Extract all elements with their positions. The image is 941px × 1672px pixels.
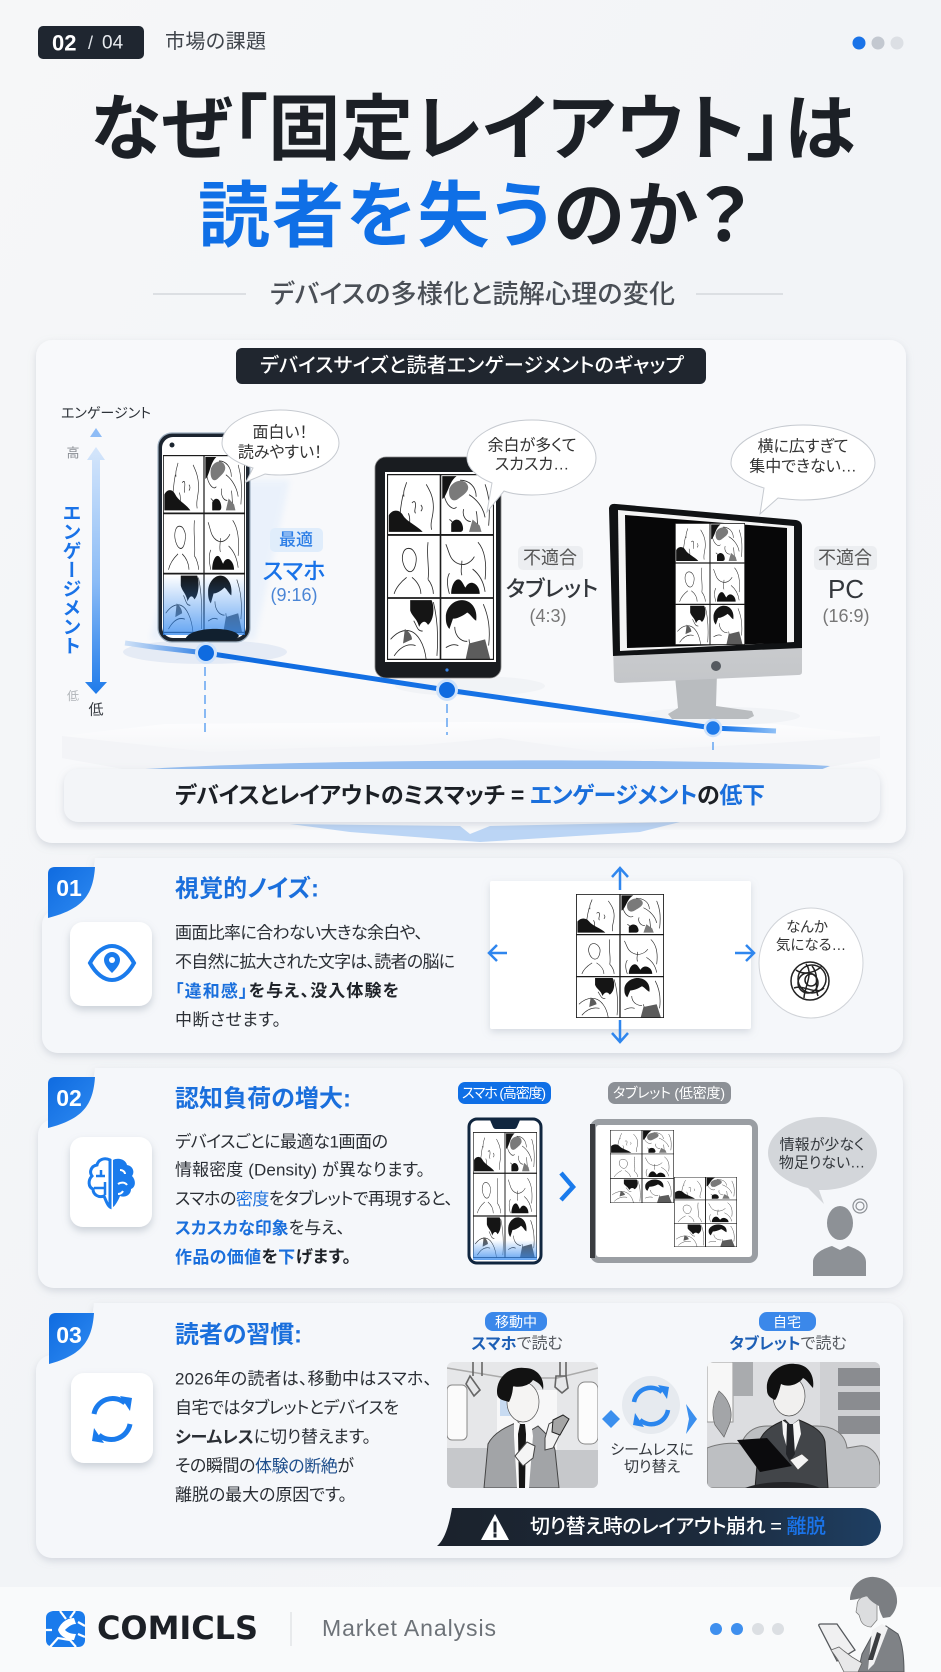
- panel: 03 reader habits: [36, 1303, 903, 1558]
- page badge: [38, 26, 144, 59]
- illustration: reader on train: [447, 1362, 598, 1488]
- bubble: reader discomfort: 気になる…: [776, 937, 846, 954]
- icon: eye: [70, 922, 152, 1006]
- body text: [175, 1370, 432, 1504]
- panel: 02 cognitive load: [38, 1068, 903, 1288]
- page badge: 04: [102, 32, 124, 54]
- body text: 画面比率に合わない大きな余白や、: [175, 924, 423, 942]
- number tab 03: 03: [56, 1322, 82, 1348]
- reader silhouette: [813, 1199, 867, 1276]
- body text: 2026年の読者は、移動中はスマホ、: [175, 1370, 432, 1388]
- label: tablet: [506, 546, 598, 626]
- page badge: 02: [52, 30, 76, 56]
- pill: tablet low density: タブレット (低密度): [613, 1085, 725, 1101]
- tag: commuting: [471, 1312, 563, 1352]
- icon: sync: [71, 1373, 153, 1463]
- summary bar: [64, 769, 880, 822]
- footer: [0, 1577, 941, 1672]
- bubble: smartphone: [222, 410, 339, 482]
- tag: commuting: 移動中: [495, 1314, 537, 1330]
- pill: tablet low density: [608, 1082, 731, 1104]
- chart heading: [236, 348, 706, 384]
- label: pc: 不適合: [818, 548, 872, 568]
- illustration: tablet: [590, 1122, 755, 1260]
- label: smartphone: (9:16): [270, 585, 318, 605]
- platform: [62, 640, 880, 842]
- axis: engagement: エンゲージメント: [60, 503, 81, 655]
- body text: デバイスごとに最適な1画面の: [175, 1132, 388, 1152]
- label: smartphone: 最適: [279, 530, 313, 550]
- chart heading: デバイスサイズと読者エンゲージメントのギャップ: [260, 353, 684, 377]
- tag: home: 自宅: [773, 1314, 801, 1330]
- label: tablet: 不適合: [523, 548, 577, 568]
- label: pc: (16:9): [822, 606, 870, 626]
- panel: device gap chart: [36, 340, 906, 843]
- engagement line: [125, 643, 776, 750]
- title: なぜ「固定レイアウト」は: [90, 90, 855, 170]
- footer dots: [710, 1623, 784, 1635]
- tag: commuting: スマホで読む: [471, 1334, 563, 1352]
- axis: engagement: 低: [88, 702, 104, 718]
- bubble: pc: 横に広すぎて: [758, 438, 848, 456]
- number tab 02: 02: [56, 1085, 82, 1111]
- body text: 情報密度 (Density) が異なります。: [175, 1160, 425, 1180]
- number tab 02: [48, 1077, 95, 1128]
- panel: 01 visual noise: [42, 858, 903, 1053]
- arrow: [561, 1173, 573, 1200]
- body text: [175, 924, 455, 1030]
- bubble: not enough info: 情報が少なく: [780, 1136, 864, 1154]
- warning bar: [437, 1508, 881, 1546]
- number tab 01: 01: [56, 875, 82, 901]
- illustration: oversized margins: [489, 868, 754, 1042]
- body text: 作品の価値を下げます。: [175, 1248, 351, 1266]
- body text: 「違和感」を与え、没入体験を: [175, 980, 399, 1000]
- heading: 認知負荷の増大:: [175, 1086, 351, 1112]
- body text: 離脱の最大の原因です。: [175, 1486, 347, 1504]
- subtitle: デバイスの多様化と読解心理の変化: [270, 279, 675, 309]
- body text: 中断させます。: [175, 1010, 281, 1030]
- label: pc: [814, 546, 877, 626]
- body text: その瞬間の体験の断絶が: [175, 1456, 354, 1476]
- bubble: not enough info: [768, 1117, 877, 1204]
- device: monitor: [609, 504, 802, 719]
- label: tablet: (4:3): [529, 606, 567, 626]
- bubble: tablet: 余白が多くて: [488, 436, 576, 454]
- illustration: reader at home: [707, 1362, 880, 1488]
- logo: [46, 1611, 85, 1647]
- section label: 市場の課題: [165, 30, 266, 53]
- progress dots: [852, 36, 904, 50]
- bubble: tablet: [467, 420, 596, 512]
- character reading tablet: [819, 1577, 904, 1672]
- body text: スカスカな印象を与え、: [175, 1218, 345, 1238]
- device: tablet: [375, 457, 501, 678]
- device: smartphone: [150, 433, 290, 642]
- sync symbol: [602, 1376, 697, 1476]
- summary bar: デバイスとレイアウトのミスマッチ = エンゲージメントの低下: [175, 782, 765, 808]
- body text: シームレスに切り替えます。: [175, 1428, 371, 1446]
- page badge: /: [88, 33, 93, 53]
- bubble: reader discomfort: [759, 908, 863, 1018]
- axis: engagement: エンゲージント: [61, 405, 151, 421]
- axis: engagement: 高: [66, 446, 80, 460]
- bubble: pc: [731, 425, 875, 514]
- number tab 03: [49, 1313, 94, 1364]
- axis: engagement: 低: [67, 689, 79, 703]
- label: pc: PC: [828, 574, 864, 604]
- tag: home: [729, 1312, 847, 1352]
- icon: brain: [70, 1137, 152, 1227]
- label: tablet: タブレット: [506, 576, 598, 602]
- header: [38, 26, 904, 59]
- sync symbol: シームレスに: [610, 1442, 694, 1458]
- footer label: Market Analysis: [322, 1615, 496, 1641]
- bubble: smartphone: 読みやすい！: [238, 444, 322, 462]
- heading: 視覚的ノイズ:: [175, 874, 319, 902]
- label: smartphone: スマホ: [263, 558, 325, 584]
- number tab 01: [48, 867, 95, 918]
- heading: 読者の習慣:: [175, 1322, 302, 1348]
- body text: 不自然に拡大された文字は、読者の脳に: [175, 952, 455, 972]
- illustration: phone: [469, 1119, 541, 1263]
- bubble: tablet: スカスカ…: [495, 456, 569, 474]
- pill: smartphone high density: [458, 1082, 551, 1104]
- bubble: smartphone: 面白い！: [252, 424, 308, 442]
- axis: engagement: [60, 405, 151, 718]
- body text: スマホの密度をタブレットで再現すると、: [175, 1188, 453, 1208]
- bubble: pc: 集中できない…: [749, 458, 857, 476]
- warning bar: 切り替え時のレイアウト崩れ = 離脱: [530, 1515, 826, 1538]
- label: smartphone: [263, 528, 325, 605]
- title: 読者を失うのか？: [198, 177, 750, 257]
- brand name: COMICLS: [97, 1609, 258, 1647]
- tag: home: タブレットで読む: [729, 1334, 847, 1352]
- bubble: reader discomfort: なんか: [786, 919, 828, 936]
- body text: 自宅ではタブレットとデバイスを: [175, 1398, 399, 1418]
- bubble: not enough info: 物足りない…: [779, 1154, 865, 1172]
- body text: [175, 1132, 453, 1266]
- sync symbol: 切り替え: [624, 1458, 680, 1476]
- title: [90, 90, 855, 257]
- pill: smartphone high density: スマホ (高密度): [462, 1085, 546, 1101]
